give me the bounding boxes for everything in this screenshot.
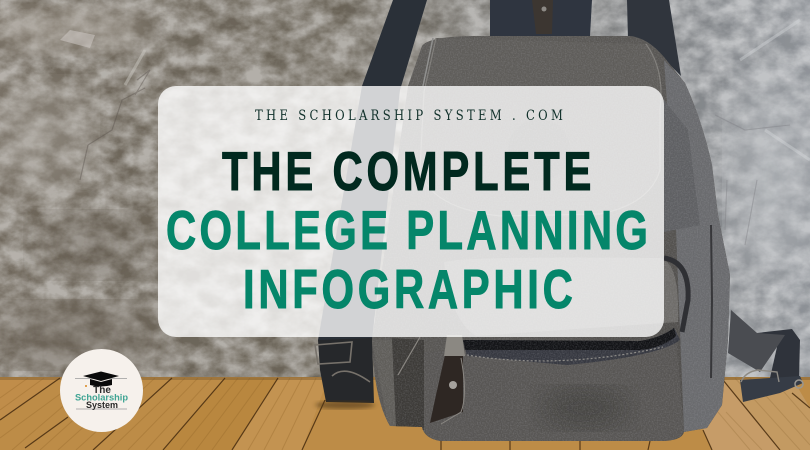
logo rules [75, 378, 127, 409]
logo word: Scholarship: Scholarship [75, 392, 128, 404]
title line 3: INFOGRAPHIC [243, 260, 573, 320]
right side strap and clip [728, 310, 803, 402]
centre top handle [490, 0, 592, 36]
side fold line [711, 225, 712, 378]
flap button [508, 119, 570, 181]
backpack body [372, 36, 730, 441]
icon: tassel dot [85, 385, 87, 387]
title line 2: COLLEGE PLANNING [166, 201, 648, 261]
logo word: System: System [86, 400, 118, 411]
zipper [463, 328, 676, 350]
fabric grain [372, 36, 730, 441]
zipper band [463, 328, 680, 365]
right shoulder strap [627, 0, 681, 76]
backpack [315, 0, 803, 441]
elastic side arc [664, 258, 688, 332]
background: wooden floor [0, 377, 810, 450]
logo word: The: The [93, 385, 111, 396]
wall cracks and flakes [60, 20, 810, 245]
translucent title panel [158, 86, 664, 337]
wood grain [0, 378, 316, 450]
logo: The Scholarship System [60, 349, 143, 432]
flap seam [423, 38, 433, 86]
website line: THE SCHOLARSHIP SYSTEM . COM [255, 107, 563, 123]
zipper pull [398, 335, 465, 424]
pocket shading [539, 388, 631, 428]
left side strap and clip [315, 338, 375, 409]
flap [420, 38, 661, 216]
icon: graduation cap [83, 372, 119, 386]
main pocket band [444, 258, 678, 336]
left shoulder strap [318, 0, 427, 340]
title line 1: THE COMPLETE [222, 142, 591, 202]
lower pocket [424, 336, 684, 441]
canvas side panels and folds [372, 52, 730, 432]
pocket stitching [467, 347, 663, 361]
